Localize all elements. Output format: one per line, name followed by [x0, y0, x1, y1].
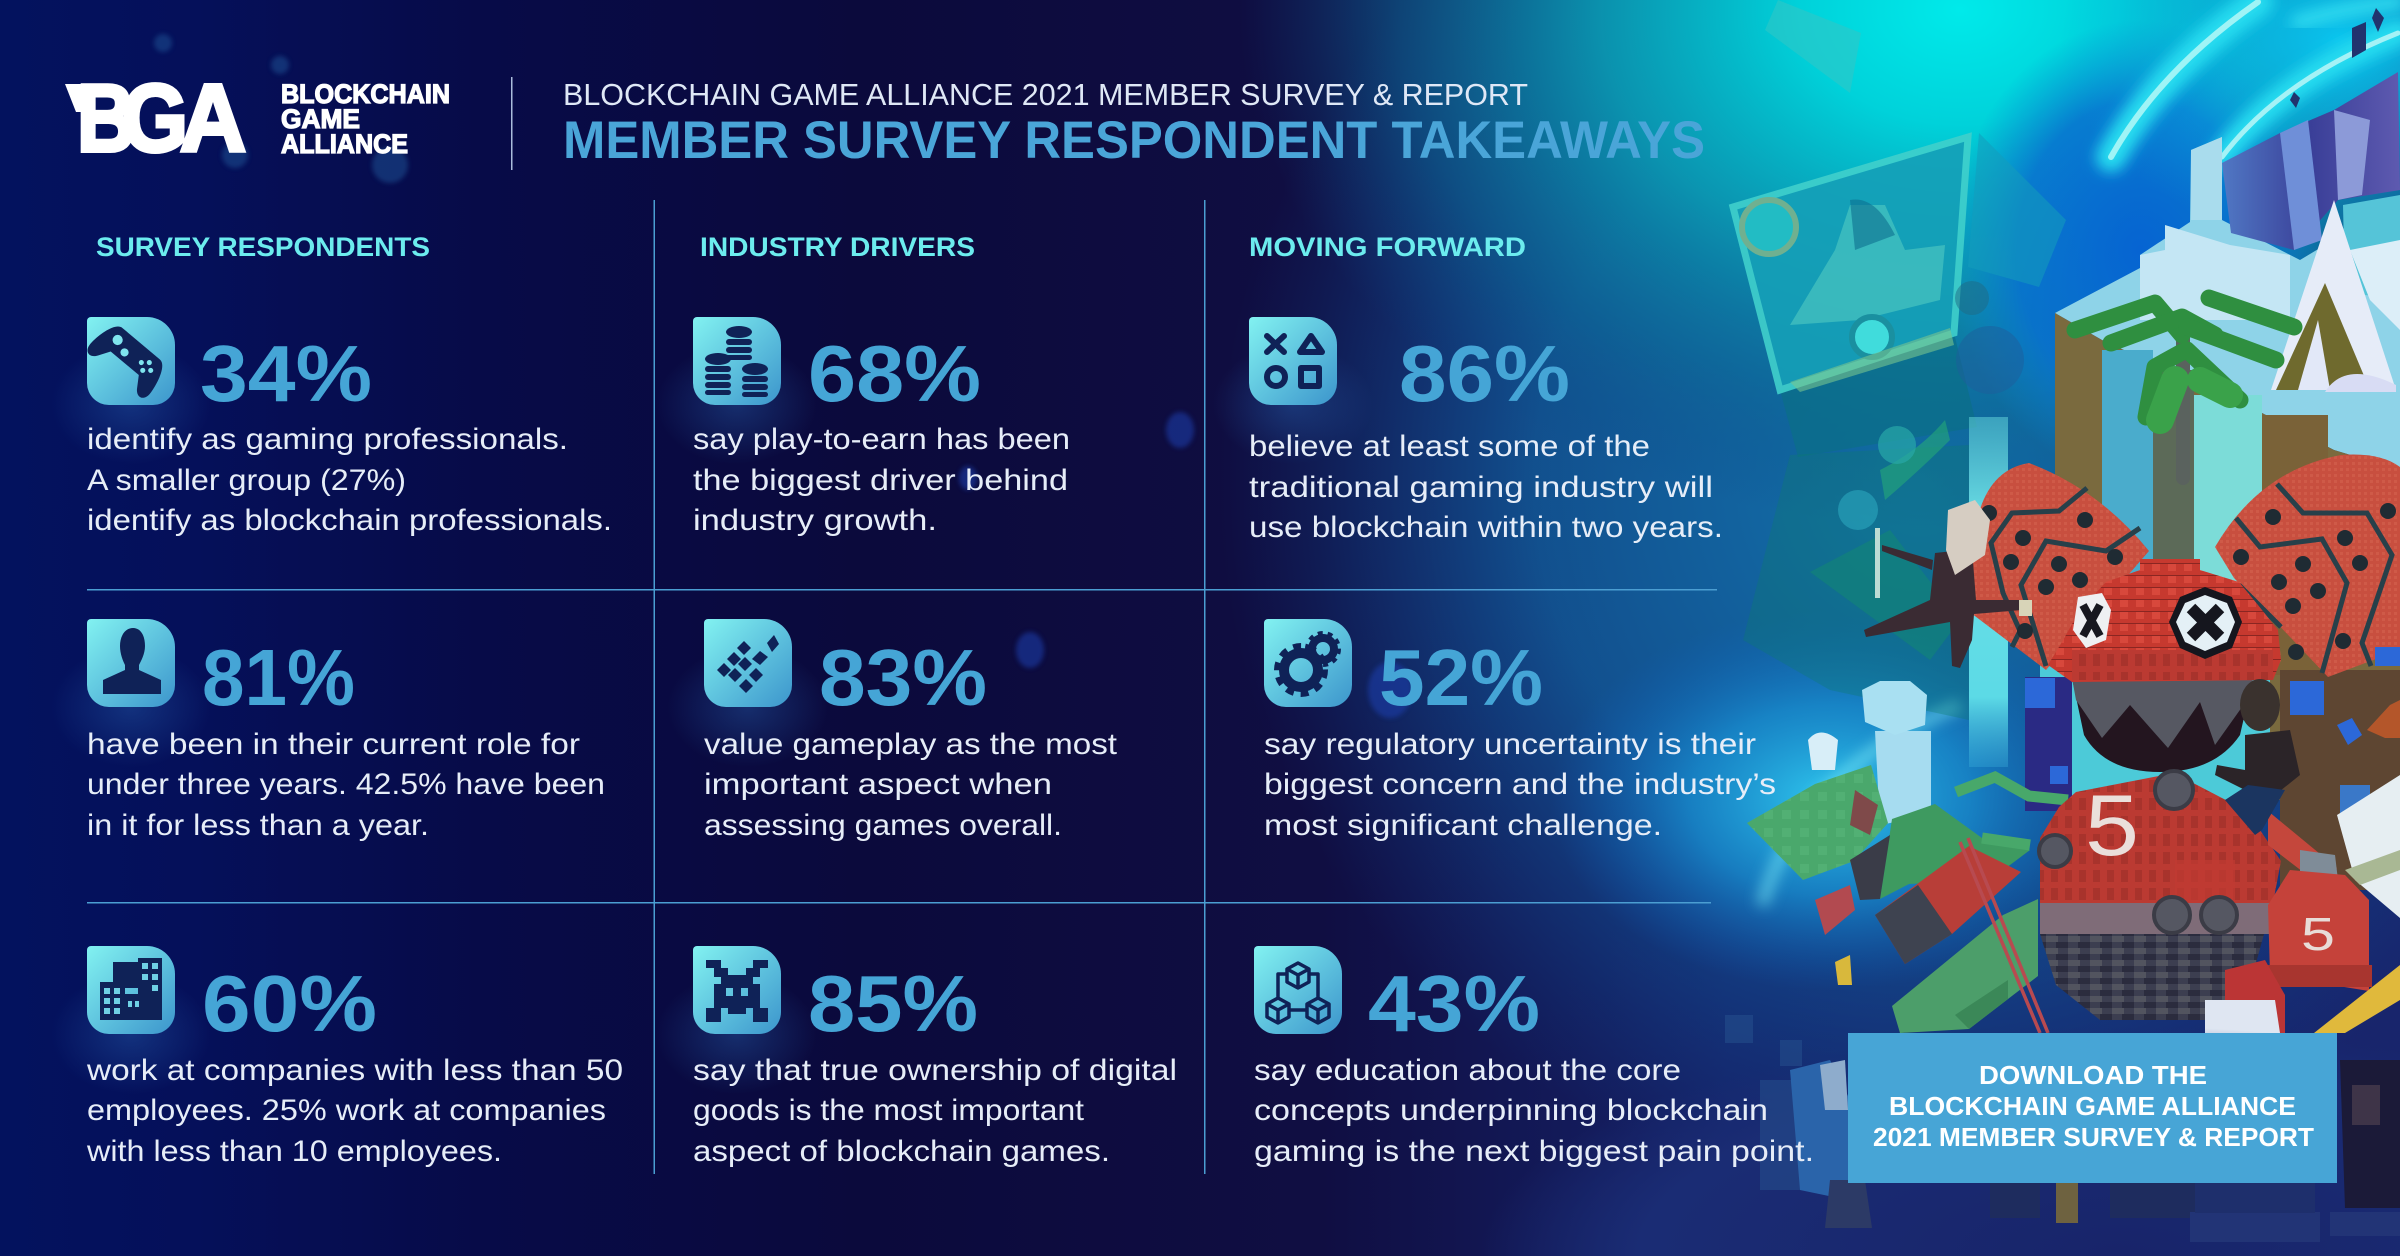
stat: 52% regulatory uncertainty [1264, 619, 1776, 842]
icon: linked cubes [1254, 946, 1342, 1034]
logo [65, 65, 450, 172]
column heading: industry drivers: INDUSTRY DRIVERS [700, 232, 975, 262]
icon: coin stacks [693, 317, 781, 405]
stat: 83% gameplay: assessing games overall. [704, 809, 1062, 842]
body [2040, 773, 2281, 903]
logo wordmark [281, 79, 450, 159]
stat: 86% traditional gaming: traditional gaming industry will [1249, 471, 1713, 504]
icon: office buildings [87, 946, 175, 1034]
eyes [2073, 593, 2111, 648]
stat: 83% gameplay [668, 619, 1118, 842]
white ship [2337, 775, 2400, 918]
flying blue cubes [2025, 647, 2400, 815]
stat: 68% play-to-earn: the biggest driver behind [693, 464, 1068, 497]
left glove [1875, 846, 2021, 964]
stat: 60% small companies: work at companies with less than 50 [86, 1054, 623, 1087]
stat: 52% regulatory uncertainty: say regulatory uncertainty is their [1264, 728, 1756, 761]
stat: 60% small companies: 60% [202, 959, 377, 1048]
logo mark BGA: B [77, 65, 135, 172]
logo mark BGA: G [122, 65, 188, 172]
illustration: palm tree [2075, 298, 2294, 478]
illustration: mouse head robot: 5 [2085, 778, 2139, 874]
column heading: moving forward: MOVING FORWARD [1249, 232, 1526, 262]
column heading: survey respondents: SURVEY RESPONDENTS [96, 232, 430, 262]
illustration: trading cards [1733, 0, 2066, 720]
stat: 34% gaming professionals: 34% [200, 329, 372, 418]
stat: 81% current role [51, 619, 605, 842]
download button [1848, 1033, 2337, 1183]
stat: 86% traditional gaming: 86% [1399, 329, 1570, 418]
illustration: foreground crowd and ground [1480, 1015, 2400, 1256]
hat [2048, 559, 2281, 682]
stat: 34% gaming professionals: A smaller group (27%) [87, 464, 406, 497]
yellow vehicle [2314, 965, 2400, 1033]
stat: 83% gameplay: value gameplay as the most [704, 728, 1118, 761]
left ear [1964, 463, 2149, 670]
logo wordmark: ALLIANCE [281, 129, 408, 159]
icon: diamond grid [704, 619, 792, 707]
icon: person [87, 619, 175, 707]
stat: 83% gameplay: important aspect when [704, 768, 1052, 801]
stat: 85% true ownership: aspect of blockchain games. [693, 1135, 1110, 1168]
stat: 85% true ownership: 85% [808, 959, 978, 1048]
stat: 85% true ownership: say that true ownership of digital [693, 1054, 1177, 1087]
stat: 43% education: concepts underpinning blockchain [1254, 1094, 1768, 1127]
climbing figure [1864, 500, 2032, 668]
stat: 34% gaming professionals [51, 317, 612, 537]
right ear [2215, 454, 2400, 677]
stat: 43% education: gaming is the next biggest pain point. [1254, 1135, 1814, 1168]
title [563, 77, 1705, 170]
stat: 60% small companies: with less than 10 employees. [86, 1135, 502, 1168]
stat: 86% traditional gaming: use blockchain within two years. [1249, 511, 1723, 544]
stat: 52% regulatory uncertainty: most significant challenge. [1264, 809, 1662, 842]
logo wordmark: BLOCKCHAIN [281, 79, 450, 109]
stat: 86% traditional gaming [1213, 317, 1723, 544]
download button: BLOCKCHAIN GAME ALLIANCE [1889, 1091, 2296, 1121]
stat: 34% gaming professionals: identify as gaming professionals. [87, 423, 568, 456]
seated figure [2215, 679, 2300, 835]
illustration: neon arcs [2111, 2, 2398, 157]
stat: 68% play-to-earn: 68% [808, 329, 981, 418]
stat: 43% education: say education about the core [1254, 1054, 1681, 1087]
stat: 85% true ownership: goods is the most important [693, 1094, 1085, 1127]
stat: 60% small companies [51, 946, 623, 1168]
download button: 2021 MEMBER SURVEY & REPORT [1873, 1122, 2314, 1152]
right arm and glove [2268, 811, 2337, 885]
stat: 43% education [1254, 946, 1814, 1168]
stat: 68% play-to-earn: say play-to-earn has been [693, 423, 1070, 456]
illustration: ice mountain [2055, 72, 2400, 470]
stat: 34% gaming professionals: identify as blockchain professionals. [87, 504, 612, 537]
stat: 83% gameplay: 83% [819, 633, 987, 722]
stat: 81% current role: under three years. 42.5% have been [87, 768, 605, 801]
icon: game controller [85, 317, 175, 405]
logo wordmark: GAME [281, 104, 360, 134]
title: MEMBER SURVEY RESPONDENT TAKEAWAYS [563, 111, 1705, 170]
illustration: bear and green creature [1747, 681, 2068, 1033]
stat: 52% regulatory uncertainty: 52% [1379, 633, 1543, 722]
stat: 81% current role: 81% [202, 633, 355, 722]
title: BLOCKCHAIN GAME ALLIANCE 2021 MEMBER SURVEY & REPORT [563, 77, 1528, 112]
icon: pixel invader [693, 946, 781, 1034]
stat: 81% current role: have been in their current role for [87, 728, 580, 761]
stat: 52% regulatory uncertainty: biggest concern and the industry’s [1264, 768, 1776, 801]
stat: 60% small companies: employees. 25% work at companies [87, 1094, 606, 1127]
logo mark BGA [65, 65, 246, 172]
logo mark BGA: A [180, 65, 246, 172]
stat: 81% current role: in it for less than a year. [87, 809, 429, 842]
download button: DOWNLOAD THE [1979, 1060, 2207, 1090]
stat: 86% traditional gaming: believe at least some of the [1249, 430, 1650, 463]
icon: controller buttons [1249, 317, 1337, 405]
stat: 68% play-to-earn: industry growth. [693, 504, 937, 537]
illustration: mouse head robot: 5 [2301, 908, 2335, 960]
mouth [2072, 678, 2253, 772]
illustration: mouse head robot [1864, 454, 2400, 1033]
icon: gears [1264, 619, 1352, 707]
illustration: voxel blocks and light beams [1969, 313, 2400, 890]
stat: 85% true ownership [657, 946, 1177, 1168]
stat: 68% play-to-earn [657, 317, 1070, 537]
stat: 43% education: 43% [1368, 959, 1540, 1048]
